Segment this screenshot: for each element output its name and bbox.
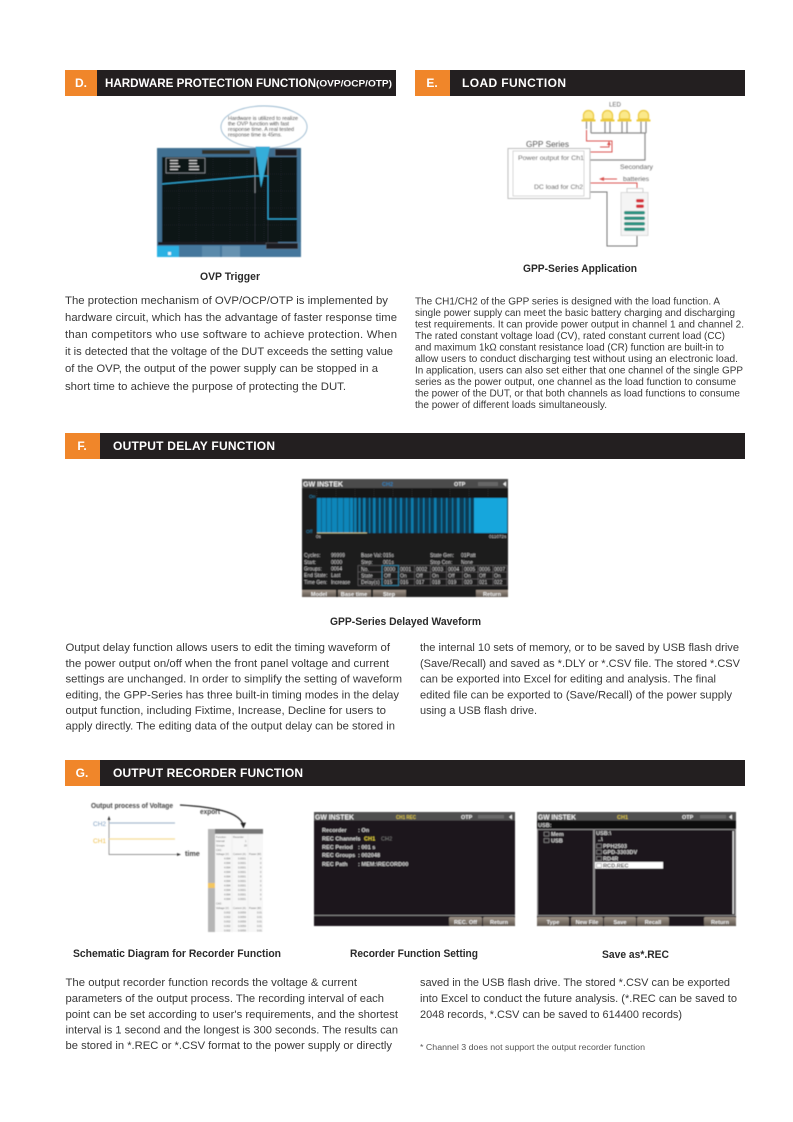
screenshot: recorder function setting screen: REC Period xyxy=(322,845,353,851)
diagram: GPP series application wiring: Secondary xyxy=(620,165,653,171)
text block: load function description: In application, users can also set either that one channel of the single GPP xyxy=(415,366,743,376)
table: exported spreadsheet: 0.01 xyxy=(257,920,263,924)
table: exported spreadsheet: 0.0001 xyxy=(238,856,246,860)
table: exported spreadsheet: 0.0001 xyxy=(238,884,246,888)
screenshot: save as REC file screen: New File xyxy=(576,920,598,926)
diagram: schematic of recorder function: Output process of Voltage xyxy=(91,801,173,810)
table: exported spreadsheet: 0 xyxy=(260,861,262,865)
table: exported spreadsheet: 0 xyxy=(260,856,262,860)
text block: protection mechanism: hardware circuit, which has the advantage of faster response time xyxy=(65,312,397,324)
screenshot: delayed waveform screen: 001s xyxy=(383,560,394,566)
table: exported spreadsheet xyxy=(208,829,263,932)
text block: load function description: single power supply can meet the basic battery charging and discharging xyxy=(415,308,735,319)
table: exported spreadsheet: 0.0059 xyxy=(238,928,246,932)
text block: recorder left column: be stored in *.REC or *.CSV format to the power supply or directly xyxy=(66,1040,392,1052)
diagram: GPP series application wiring xyxy=(508,102,653,246)
caption: GPP-Series Delayed Waveform: GPP-Series Delayed Waveform xyxy=(330,616,481,628)
table: exported spreadsheet: 0.01 xyxy=(257,924,263,928)
screenshot: recorder function setting screen: : 001 s xyxy=(358,845,375,851)
table: exported spreadsheet: 20 xyxy=(244,844,247,848)
screenshot: save as REC file screen: USB xyxy=(551,838,563,844)
soft keys: Return xyxy=(483,592,502,598)
screenshot: recorder function setting screen: GW INSTEK xyxy=(315,812,355,822)
text block: output delay right column: edited file can be exported to (Save/Recall) of the power supply xyxy=(420,690,732,702)
text block: protection mechanism: it is detected that the voltage of the DUT exceeds the setting value xyxy=(65,346,393,358)
heading: F output delay function: OUTPUT DELAY FUNCTION xyxy=(113,439,275,453)
table: exported spreadsheet: 0.002 xyxy=(224,920,230,924)
screenshot: delayed waveform screen: Off xyxy=(306,529,313,535)
text block: load function description: test requirements. It can provide power output in channel 1 and channel 2. xyxy=(415,320,744,330)
table: exported spreadsheet: 0.002 xyxy=(224,916,230,919)
screenshot: delayed waveform screen: None xyxy=(461,560,473,566)
table: exported spreadsheet: Voltage (V) xyxy=(216,907,229,910)
screenshot: delayed waveform screen: OTP xyxy=(454,482,466,488)
icon: battery xyxy=(621,188,648,236)
table: exported spreadsheet: Groups xyxy=(216,844,225,848)
table: exported spreadsheet: 0.0001 xyxy=(238,861,246,865)
table: delay settings: On xyxy=(464,574,471,580)
screenshot: delayed waveform screen: 0s xyxy=(316,534,322,539)
table: delay settings: 019 xyxy=(448,580,457,586)
table: exported spreadsheet: Current (A) xyxy=(233,906,246,910)
callout: OVP response time: response time. A real tested xyxy=(228,127,294,133)
text block: load function description: the power of different loads simultaneously. xyxy=(415,400,607,411)
screenshot: recorder function setting screen: REC Path xyxy=(322,862,348,868)
table: exported spreadsheet: 4.994 xyxy=(224,898,230,901)
panel: D hardware protection function xyxy=(65,70,397,393)
table: delay settings: 0002 xyxy=(416,567,427,573)
table: exported spreadsheet: Recorder xyxy=(233,835,244,839)
text block: output delay right column: (Save/Recall) and saved as *.DLY or *.CSV file. The stored *.CSV xyxy=(420,658,740,670)
screenshot: delayed waveform screen: 01Patt xyxy=(461,553,476,559)
screenshot: save as REC file screen: Mem xyxy=(551,832,564,838)
screenshot: delayed waveform screen xyxy=(302,479,508,598)
text block: load function description: series as the power output, one channel as the load function to consume xyxy=(415,377,736,388)
screenshot: recorder function setting screen: Return xyxy=(490,920,509,926)
screenshot: delayed waveform screen: 015s xyxy=(383,553,394,559)
screenshot: delayed waveform screen: On xyxy=(309,494,316,500)
table: exported spreadsheet: 0.01 xyxy=(257,928,263,932)
screenshot: save as REC file screen: Return xyxy=(711,920,730,926)
text block: protection mechanism: of the OVP, the output of the power supply can be stopped in a xyxy=(65,363,379,375)
soft keys: Base time xyxy=(341,592,367,598)
table: exported spreadsheet: 0.0059 xyxy=(238,920,246,924)
table: delay settings: 0001 xyxy=(400,567,411,573)
text block: load function description: allow users to conduct discharging test without using an electronic load. xyxy=(415,354,738,365)
heading: F output delay function xyxy=(65,433,745,459)
table: delay settings: 015 xyxy=(384,580,393,586)
panel: G output recorder function xyxy=(65,760,745,1052)
table: delay settings: State xyxy=(361,574,373,580)
table: exported spreadsheet: 0.0001 xyxy=(238,866,246,870)
table: exported spreadsheet: 0 xyxy=(260,884,262,888)
table: delay settings: 0005 xyxy=(464,567,475,573)
heading: D hardware protection function: D. xyxy=(75,76,87,90)
diagram: schematic of recorder function xyxy=(91,801,263,932)
text block: output delay right column: the internal 10 sets of memory, or to be saved by USB flash drive xyxy=(420,642,739,654)
text block: load function description: the power of the DUT, or that both channels as load functions to consume xyxy=(415,388,740,400)
table: exported spreadsheet: 1 xyxy=(245,839,247,843)
table: delay settings: 018 xyxy=(432,580,441,586)
screenshot: delayed waveform screen: 0000 xyxy=(331,560,342,566)
heading: G output recorder function: OUTPUT RECORDER FUNCTION xyxy=(113,766,303,780)
text block: recorder left column xyxy=(66,977,399,1052)
text block: recorder left column: parameters of the output process. The recording interval of each xyxy=(66,993,384,1005)
diagram: GPP series application wiring: batteries xyxy=(623,177,649,183)
text block: output delay left column: output function, including Fixtime, Increase, Decline for users to xyxy=(66,705,386,717)
panel: E load function xyxy=(415,70,745,411)
table: exported spreadsheet: 0.0001 xyxy=(238,897,246,901)
callout: OVP response time: response time is 45ms. xyxy=(228,132,282,138)
screenshot: recorder function setting screen: OTP xyxy=(461,815,473,821)
screenshot: save as REC file screen: RD4R xyxy=(603,856,618,862)
table: delay settings: 0006 xyxy=(479,567,490,573)
screenshot: delayed waveform screen: Last xyxy=(331,573,341,579)
table: exported spreadsheet: CH2: xyxy=(216,902,222,906)
table: exported spreadsheet: 4.994 xyxy=(224,894,230,896)
chart: output delay waveform xyxy=(317,489,507,533)
chart: CH1 and CH2 voltage over time xyxy=(93,816,200,858)
screenshot: delayed waveform screen: Cycles: xyxy=(304,553,320,559)
table: delay settings: 017 xyxy=(416,580,425,586)
soft keys: Model xyxy=(311,592,328,598)
table: exported spreadsheet: 0.0001 xyxy=(238,888,246,892)
table: delay settings: On xyxy=(400,574,407,580)
screenshot: save as REC file screen: ..\ xyxy=(598,837,603,843)
screenshot: delayed waveform screen: CH2 xyxy=(382,482,393,488)
table: exported spreadsheet: Power (W) xyxy=(249,906,261,910)
text block: load function description: and maximum 1kΩ constant resistance load (CR) function are built-in to xyxy=(415,342,724,354)
screenshot: recorder function setting screen: : xyxy=(358,836,360,842)
table: exported spreadsheet: Voltage (V) xyxy=(216,853,229,856)
soft keys xyxy=(302,590,508,598)
table: exported spreadsheet: 0 xyxy=(260,897,262,901)
table: exported spreadsheet: 0 xyxy=(260,892,262,896)
table: delay settings: 0003 xyxy=(432,567,443,573)
heading: G output recorder function xyxy=(65,760,745,786)
table: exported spreadsheet: 0.0059 xyxy=(238,910,246,914)
caption: Save as REC: Save as*.REC xyxy=(602,949,669,961)
table: exported spreadsheet: 0 xyxy=(260,879,262,883)
text block: output delay left column: Output delay function allows users to edit the timing waveform of xyxy=(66,642,391,654)
table: exported spreadsheet: 4.994 xyxy=(224,884,230,888)
screenshot: recorder function setting screen: : 002048 xyxy=(358,853,380,859)
table: exported spreadsheet: 4.994 xyxy=(224,866,230,870)
table: exported spreadsheet: 4.994 xyxy=(224,858,230,860)
caption: OVP Trigger: OVP Trigger xyxy=(200,271,261,283)
table: delay settings: No. xyxy=(361,567,369,573)
text block: recorder left column: The output recorder function records the voltage & current xyxy=(66,977,358,989)
text block: protection mechanism: than competitors who use software to achieve protection. When xyxy=(65,329,397,341)
table: exported spreadsheet: 0.0059 xyxy=(238,915,246,919)
table: delay settings: Off xyxy=(416,574,423,580)
screenshot: delayed waveform screen: Groups: xyxy=(304,566,322,572)
text block: output delay right column: can be exported into Excel for editing and analysis. The final xyxy=(420,674,716,686)
table: exported spreadsheet: 4.994 xyxy=(224,880,230,883)
screenshot: delayed waveform screen: End State: xyxy=(304,573,327,579)
table: exported spreadsheet: Interval xyxy=(216,840,225,843)
caption: GPP-Series Application: GPP-Series Application xyxy=(523,263,637,275)
text block: protection mechanism xyxy=(65,295,397,393)
panel: F output delay function xyxy=(65,433,745,732)
screenshot: save as REC file screen: Save xyxy=(613,920,627,926)
text block: protection mechanism: short time to achieve the purpose of protecting the DUT. xyxy=(65,381,346,393)
table: delay settings: On xyxy=(432,574,439,580)
screenshot: delayed waveform screen: 0064 xyxy=(331,566,342,572)
screenshot: delayed waveform screen: GW INSTEK xyxy=(303,480,344,488)
chart: CH1 and CH2 voltage over time: CH1 xyxy=(93,838,106,845)
table: exported spreadsheet: 0 xyxy=(260,870,262,874)
callout: OVP response time: the OVP function with fast xyxy=(228,122,290,128)
text block: output delay right column: using a USB flash drive. xyxy=(420,705,537,717)
heading: D hardware protection function: (OVP/OCP/OTP) xyxy=(316,78,392,90)
screenshot: delayed waveform screen: 99999 xyxy=(331,553,345,559)
text block: recorder right column: into Excel to conduct the future analysis. (*.REC can be saved to xyxy=(420,993,737,1005)
heading: E load function xyxy=(415,70,745,96)
heading: F output delay function: F. xyxy=(77,439,87,453)
soft keys: Step xyxy=(383,592,396,598)
table: delay settings: 021 xyxy=(479,580,488,586)
screenshot: recorder function setting screen xyxy=(314,812,515,926)
table: exported spreadsheet: 0.002 xyxy=(224,930,230,932)
table: exported spreadsheet: 0.01 xyxy=(257,910,263,914)
screenshot: save as REC file screen: Recall xyxy=(645,920,662,926)
table: exported spreadsheet: 0.002 xyxy=(224,925,230,928)
screenshot: delayed waveform screen: Time Gen: xyxy=(304,580,327,586)
table: exported spreadsheet: 0 xyxy=(260,874,262,878)
screenshot: recorder function setting screen: REC. Off xyxy=(454,920,477,926)
table: delay settings xyxy=(358,566,507,586)
heading: D hardware protection function xyxy=(65,70,396,96)
table: exported spreadsheet: 4.994 xyxy=(224,889,230,892)
table: exported spreadsheet: Current (A) xyxy=(233,852,246,856)
table: exported spreadsheet: Function xyxy=(216,836,226,839)
screenshot: save as REC file screen: GW INSTEK xyxy=(538,812,577,822)
heading: G output recorder function: G. xyxy=(76,766,88,780)
screenshot: recorder function setting screen: CH2 xyxy=(381,836,392,842)
table: delay settings: Off xyxy=(448,574,455,580)
text block: output delay left column xyxy=(66,642,402,732)
table: exported spreadsheet: 0.002 xyxy=(224,912,230,914)
text block: output delay left column: apply directly. The editing data of the output delay can be stored in xyxy=(66,720,395,732)
diagram: GPP series application wiring: LED xyxy=(609,102,622,108)
heading: D hardware protection function: HARDWARE PROTECTION FUNCTION xyxy=(105,76,316,90)
caption: Schematic Diagram for Recorder Function: Schematic Diagram for Recorder Function xyxy=(73,948,281,960)
diagram: schematic of recorder function: export xyxy=(200,807,221,816)
screenshot: recorder function setting screen: : On xyxy=(358,828,370,834)
screenshot: recorder function setting screen: Recorder xyxy=(322,828,347,834)
diagram: GPP series application wiring: Power output for Ch1 xyxy=(518,155,584,162)
text block: output delay left column: editing, the GPP-Series has three built-in timing modes in the delay xyxy=(66,690,399,702)
text block: protection mechanism: The protection mechanism of OVP/OCP/OTP is implemented by xyxy=(65,295,388,307)
screenshot: delayed waveform screen: State Gen: xyxy=(430,553,454,559)
screenshot: recorder function setting screen: REC Channels xyxy=(322,836,361,842)
text block: output delay left column: settings are unchanged. In order to simplify the setting of waveform xyxy=(66,674,402,686)
screenshot: recorder function setting screen: CH1 REC xyxy=(396,815,416,821)
text block: load function description: The rated constant voltage load (CV), rated constant current load (CC) xyxy=(415,331,725,342)
text block: load function description: The CH1/CH2 of the GPP series is designed with the load function. A xyxy=(415,296,720,308)
chart: CH1 and CH2 voltage over time: time xyxy=(185,849,200,858)
heading: E load function: LOAD FUNCTION xyxy=(462,76,566,90)
table: exported spreadsheet: CH1: xyxy=(216,848,222,852)
table: exported spreadsheet: 0.0001 xyxy=(238,879,246,883)
chart: CH1 and CH2 voltage over time: CH2 xyxy=(93,821,106,828)
icon: LEDs xyxy=(582,110,650,160)
wires xyxy=(586,130,637,246)
arrow: export xyxy=(180,805,246,828)
screenshot: recorder function setting screen: : MEM:\RECORD00 xyxy=(358,862,408,868)
text block: output delay right column xyxy=(420,642,740,717)
screenshot: delayed waveform screen: Base Val: xyxy=(361,553,382,559)
screenshot: delayed waveform screen: Step: xyxy=(361,560,373,566)
screenshot: save as REC file screen: PPH2503 xyxy=(603,844,627,850)
text block: output delay left column: the power output on/off when the front panel voltage and current xyxy=(66,658,390,670)
screenshot: delayed waveform screen: Stop Con: xyxy=(430,560,452,566)
table: delay settings: 020 xyxy=(464,580,473,586)
screenshot: recorder function setting screen: REC Groups xyxy=(322,853,355,859)
diagram: GPP series application wiring: DC load for Ch2 xyxy=(534,184,583,191)
table: delay settings: 0000 xyxy=(384,567,395,573)
screenshot: recorder function setting screen: CH1 xyxy=(364,836,375,842)
screenshot: save as REC file screen: OTP xyxy=(682,815,694,821)
screenshot: delayed waveform screen: Start: xyxy=(304,560,316,566)
table: exported spreadsheet: 4.994 xyxy=(224,871,230,874)
table: exported spreadsheet: 4.994 xyxy=(224,876,230,878)
table: exported spreadsheet: Power (W) xyxy=(249,852,261,856)
screenshot: save as REC file screen: GPD-3303DV xyxy=(603,850,637,856)
caption: Recorder Function Setting: Recorder Function Setting xyxy=(350,948,478,960)
callout: OVP response time xyxy=(221,106,307,188)
screenshot: save as REC file screen: USB:\ xyxy=(596,831,612,837)
screenshot: save as REC file screen: RCD.REC xyxy=(603,864,628,870)
table: delay settings: 022 xyxy=(494,580,503,586)
table: exported spreadsheet: 0.0059 xyxy=(238,924,246,928)
screenshot: save as REC file screen: CH1 xyxy=(617,815,628,821)
text block: recorder right column xyxy=(420,977,737,1021)
table: delay settings: Off xyxy=(384,574,391,580)
screenshot: save as REC file screen xyxy=(537,812,736,926)
text block: recorder right column: 2048 records, *.CSV can be saved to 614400 records) xyxy=(420,1009,682,1021)
table: exported spreadsheet: 0.0001 xyxy=(238,892,246,896)
table: delay settings: On xyxy=(494,574,501,580)
heading: E load function: E. xyxy=(426,76,438,90)
footnote: * Channel 3 does not support the output recorder function xyxy=(420,1043,645,1052)
screenshot: save as REC file screen: Type xyxy=(547,920,559,926)
table: exported spreadsheet: 0.0001 xyxy=(238,870,246,874)
table: exported spreadsheet: 0.01 xyxy=(257,915,263,919)
text block: recorder left column: point can be set according to user's requirements, and the shortest xyxy=(66,1009,399,1021)
screenshot: save as REC file screen: USB: xyxy=(538,823,552,829)
screenshot: delayed waveform screen: 011072s xyxy=(489,534,507,539)
table: delay settings: 0004 xyxy=(448,567,459,573)
table: exported spreadsheet: 0 xyxy=(260,866,262,870)
table: exported spreadsheet: 0.0001 xyxy=(238,874,246,878)
table: delay settings: Delay(s) xyxy=(361,580,380,586)
diagram: GPP series application wiring: GPP Series xyxy=(526,139,569,149)
table: delay settings: 0007 xyxy=(494,567,505,573)
callout: OVP response time: Hardware is utilized to realize xyxy=(228,116,298,122)
text block: recorder left column: interval is 1 second and the longest is 300 seconds. The results can xyxy=(66,1024,398,1036)
chart: OVP trigger oscilloscope screenshot with callout xyxy=(157,106,307,257)
text block: recorder right column: saved in the USB flash drive. The stored *.CSV can be exported xyxy=(420,977,730,989)
text block: load function description xyxy=(415,296,744,411)
table: delay settings: Off xyxy=(479,574,486,580)
table: exported spreadsheet: 0 xyxy=(260,888,262,892)
table: delay settings: 016 xyxy=(400,580,409,586)
screenshot: delayed waveform screen: Increase xyxy=(331,580,350,586)
table: exported spreadsheet: 4.994 xyxy=(224,862,230,865)
